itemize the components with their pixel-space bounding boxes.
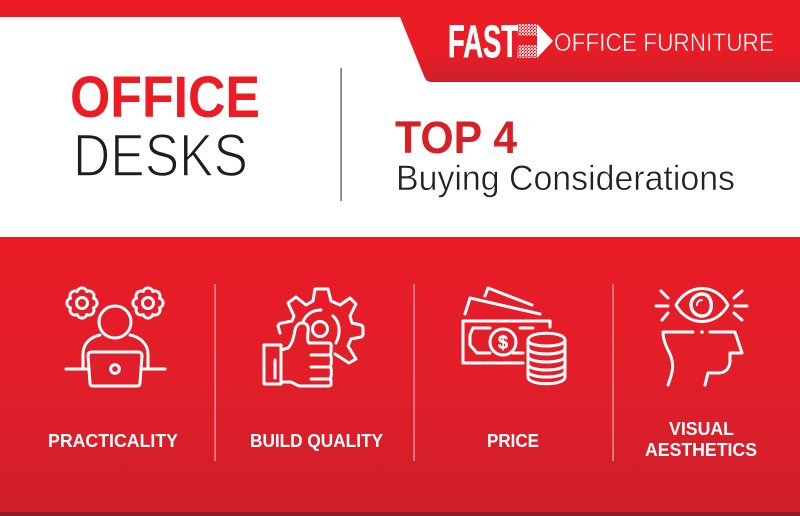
label: visual aesthetics: AESTHETICS — [645, 440, 757, 460]
icon part: front banknote — [463, 321, 550, 363]
column dividers — [214, 284, 614, 461]
title: office desks — [70, 65, 260, 189]
icon part: person — [83, 306, 148, 368]
icon: banknotes and coins — [463, 288, 565, 384]
icon part: eye — [676, 288, 728, 322]
icon part: laptop — [66, 352, 165, 386]
icon part: back notes — [465, 288, 540, 314]
icon: gear with thumbs up — [264, 289, 363, 386]
subtitle: top 4 buying considerations: TOP 4 — [395, 112, 517, 163]
brand logo — [448, 16, 774, 67]
brand logo: OFFICE FURNITURE — [554, 29, 774, 57]
icon part: right gear — [133, 288, 163, 318]
label: build quality: BUILD QUALITY — [250, 431, 383, 451]
icon: person at laptop with gears — [66, 288, 165, 386]
icon part: rays — [656, 291, 747, 320]
icon: head with eye — [656, 288, 747, 385]
icon part: coin stack — [528, 333, 565, 384]
label: price: PRICE — [487, 431, 539, 451]
vertical header divider — [340, 68, 342, 201]
icon part: gear — [278, 289, 363, 363]
subtitle: top 4 buying considerations — [395, 112, 735, 198]
icon part: left gear — [67, 288, 97, 318]
header banner — [0, 0, 800, 82]
icon part: thumbs-up hand — [264, 323, 331, 386]
icon part: dollar coin: $ — [498, 332, 508, 352]
label: visual aesthetics: VISUAL — [669, 419, 734, 439]
icon part: inner ring — [303, 310, 339, 343]
title: office desks: OFFICE — [70, 65, 260, 130]
panel bottom edge — [0, 512, 800, 516]
title: office desks: DESKS — [73, 122, 248, 189]
icon part: head outline — [663, 332, 742, 385]
red lower panel — [0, 237, 800, 516]
subtitle: top 4 buying considerations: Buying Considerations — [396, 159, 735, 198]
brand logo: FAST — [448, 16, 518, 67]
label: practicality: PRACTICALITY — [48, 431, 178, 451]
label: visual aesthetics — [645, 419, 757, 460]
